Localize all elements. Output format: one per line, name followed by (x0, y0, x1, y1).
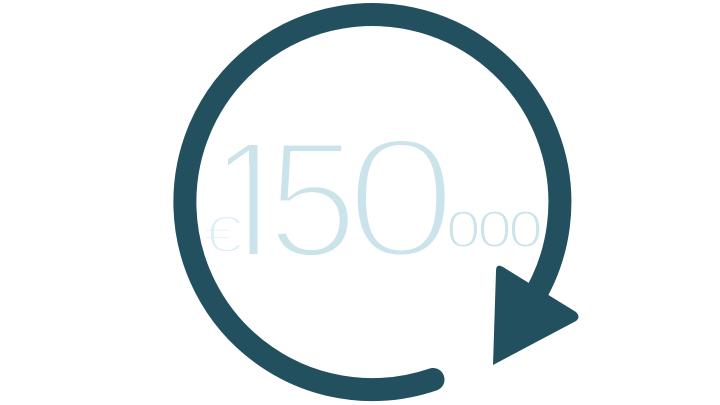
small digits 000 (446, 201, 543, 259)
large number 150: 1 (204, 107, 297, 293)
euro sign: € (203, 206, 243, 264)
small digits 000: 0 (508, 201, 543, 259)
small digits 000: 0 (446, 201, 481, 259)
arrowhead (493, 266, 578, 365)
small digits 000: 0 (477, 201, 512, 259)
large number 150 (228, 141, 445, 256)
circular arc (185, 15, 560, 390)
large number 150: 0 (345, 101, 457, 294)
amount: 150 000 euros (206, 141, 540, 256)
large number 150: 5 (267, 107, 358, 293)
circular arrow (185, 15, 579, 390)
